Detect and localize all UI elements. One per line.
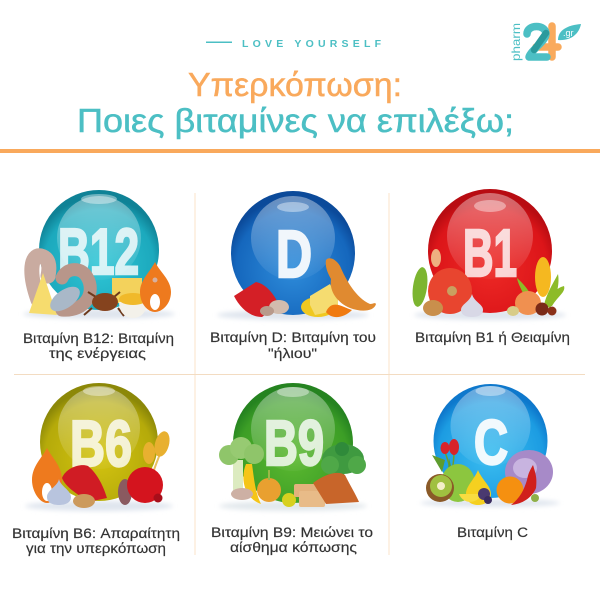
sphere D [231,191,355,315]
sphere B6: B6 [70,407,132,480]
sphere C [434,384,548,498]
sphere B12 [39,190,159,310]
panel: vitamin D [210,191,376,361]
panel: vitamin B9 [211,383,373,555]
panel: vitamin C [420,384,560,540]
icon: B9 foods [219,437,366,507]
label B6: για την υπερκόπωση [26,541,166,556]
logo: pharm24.gr: pharm [509,23,523,61]
icon: C foods [426,439,553,505]
title: Υπερκόπωση: [188,66,402,103]
icon: B1 foods [410,249,564,317]
panel: vitamin B6 [12,383,180,556]
label B12: Βιταμίνη B12: Βιταμίνη [23,331,174,346]
sphere B1 [428,189,552,313]
label B6: Βιταμίνη B6: Απαραίτητη [12,526,180,541]
label B9: αίσθημα κόπωσης [230,540,358,555]
label B9: Βιταμίνη B9: Μειώνει το [211,525,373,540]
sphere B12: B12 [58,215,139,288]
sphere D: D [276,217,312,292]
label D: "ήλιου" [268,346,317,361]
sphere B9 [233,383,353,503]
panel: vitamin B1 [410,189,570,345]
logo: pharm24.gr: .gr [563,28,574,38]
label B1: Βιταμίνη B1 ή Θειαμίνη [415,330,570,345]
label C: Βιταμίνη C [457,525,528,540]
panel: vitamin B12 [23,190,175,361]
sphere C: C [474,408,508,478]
sphere B1: B1 [463,216,517,291]
title: Ποιες βιταμίνες να επιλέξω; [77,102,514,139]
icon: B12 foods [29,256,171,318]
label B6 [12,526,180,556]
header tagline: love yourself: LOVE YOURSELF [242,38,382,50]
icon: D foods [234,258,376,317]
sphere B9: B9 [264,407,324,479]
label B12: της ενέργειας [49,346,147,361]
logo: pharm24.gr [509,23,581,61]
label B9 [211,525,373,555]
orange header rule [0,149,600,153]
title [77,66,514,139]
sphere B6 [40,383,158,501]
icon: B6 foods [32,430,172,508]
label D [210,330,376,361]
label B12 [23,331,174,361]
label D: Βιταμίνη D: Βιταμίνη του [210,330,376,345]
